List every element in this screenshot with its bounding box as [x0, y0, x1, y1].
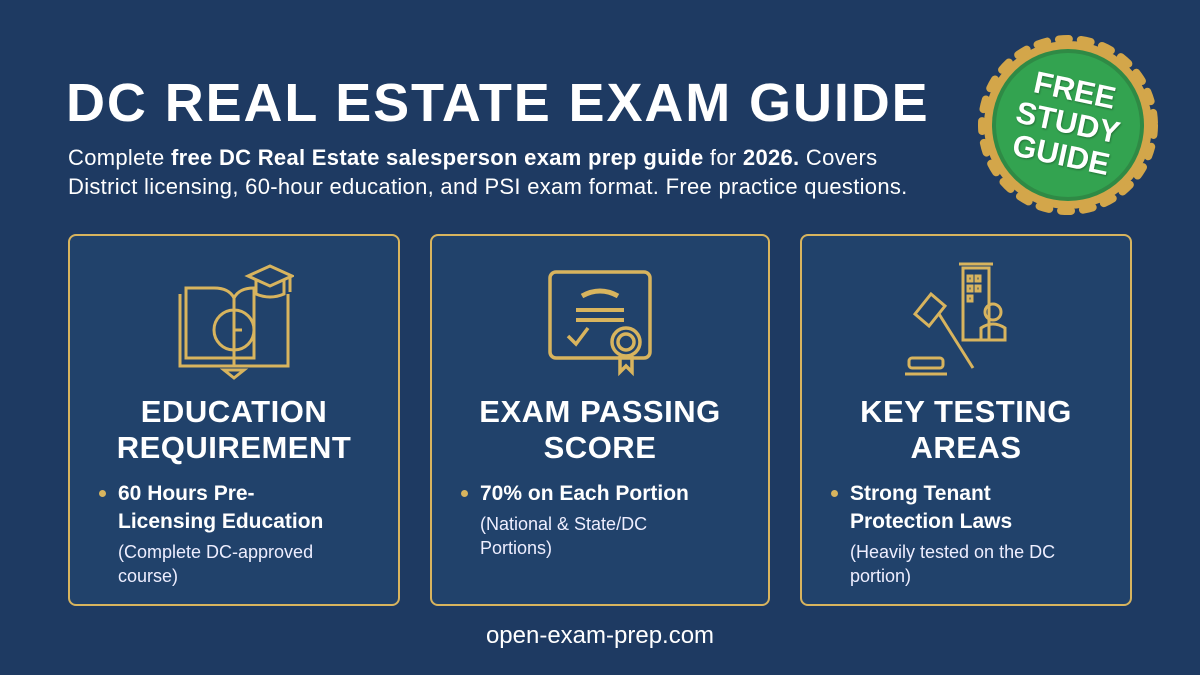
panel: key testing areas	[800, 234, 1132, 606]
bullet: 70% on Each Portion	[480, 482, 689, 505]
heading: AREAS	[910, 430, 1022, 465]
badge: free study guide: STUDY	[1013, 94, 1123, 151]
badge: free study guide: FREE	[1031, 65, 1119, 116]
heading: EXAM PASSING	[479, 394, 721, 429]
badge: free study guide: GUIDE	[1009, 127, 1113, 182]
note	[480, 514, 647, 558]
heading: SCORE	[544, 430, 656, 465]
bullet	[850, 480, 1110, 536]
panel: passing score	[430, 234, 770, 606]
bullet: Strong Tenant	[850, 482, 991, 505]
bullet	[118, 480, 378, 536]
note	[118, 542, 313, 586]
icon: book with clock	[178, 264, 294, 380]
title: DC REAL ESTATE EXAM GUIDE	[66, 73, 930, 133]
heading: KEY TESTING	[860, 394, 1072, 429]
badge: free study guide	[978, 35, 1158, 215]
heading	[117, 394, 351, 465]
note: (Complete DC-approved	[118, 542, 313, 562]
icon: certificate	[548, 270, 652, 376]
heading	[860, 394, 1072, 465]
note: Portions)	[480, 538, 552, 558]
panel: education	[68, 234, 400, 606]
heading: EDUCATION	[141, 394, 327, 429]
subtitle: District licensing, 60-hour education, and PSI exam format. Free practice questions.	[68, 174, 908, 199]
bullet: Licensing Education	[118, 510, 323, 533]
subtitle: Complete free DC Real Estate salesperson exam prep guide for 2026. Covers	[68, 145, 877, 170]
bullet: 60 Hours Pre-	[118, 482, 255, 505]
heading	[479, 394, 721, 465]
subtitle	[68, 145, 908, 199]
note: (National & State/DC	[480, 514, 647, 534]
note	[850, 542, 1055, 586]
note: course)	[118, 566, 178, 586]
note: (Heavily tested on the DC	[850, 542, 1055, 562]
icon: gavel and building	[905, 262, 1006, 376]
note: portion)	[850, 566, 911, 586]
footer: open-exam-prep.com	[486, 622, 714, 649]
heading: REQUIREMENT	[117, 430, 351, 465]
bullet: Protection Laws	[850, 510, 1012, 533]
